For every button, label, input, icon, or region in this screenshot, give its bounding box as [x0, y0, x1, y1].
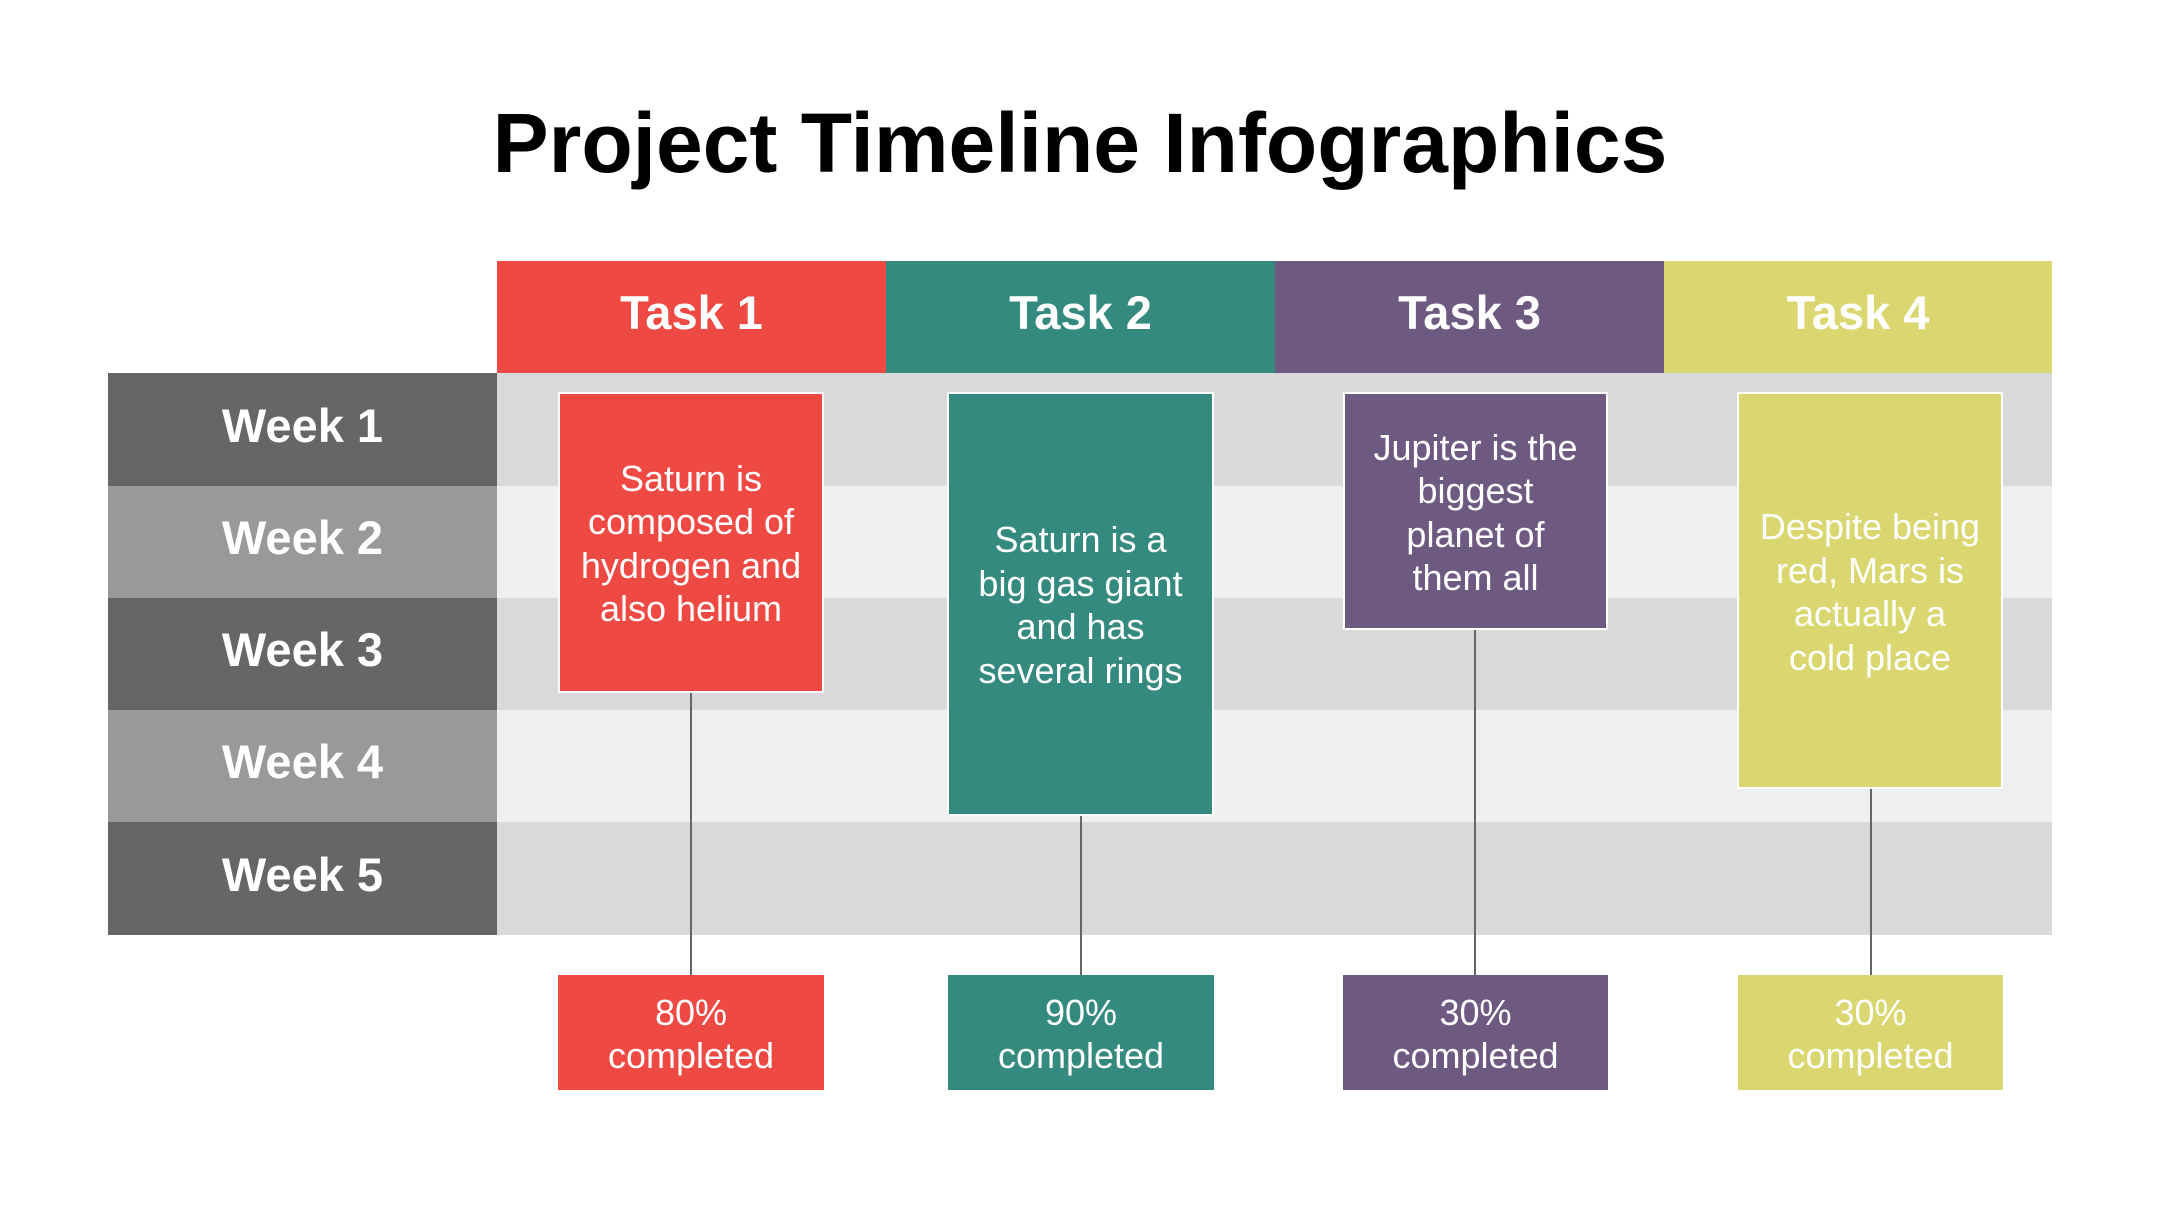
header: Task 1 [497, 261, 886, 373]
header: Task 4: Task 4 [1787, 286, 1929, 338]
task card 2: and has [1016, 606, 1145, 647]
task headers [497, 261, 2052, 373]
connector line: task 1 [690, 692, 692, 975]
task card 4: red, Mars is [1776, 550, 1964, 590]
progress box: 30% task 3: completed [1392, 1035, 1559, 1076]
task card 3: planet of [1406, 514, 1545, 554]
task card 1: hydrogen and [581, 545, 801, 586]
progress box: 90%: 90% [1045, 992, 1117, 1032]
label: Week 2: Week 2 [222, 511, 383, 564]
connector line: task 2 [1080, 815, 1082, 975]
label: Week 5 [108, 822, 497, 935]
task card 3: biggest [1417, 470, 1534, 511]
week labels [108, 373, 497, 935]
task card 4: cold place [1789, 636, 1951, 678]
label: Week 5: Week 5 [222, 848, 383, 900]
task card 1: Saturn is [620, 458, 762, 499]
connector line: task 4 [1870, 789, 1872, 975]
header: Task 3: Task 3 [1398, 286, 1541, 338]
label: Week 1: Week 1 [222, 398, 383, 452]
task card 4: actually a [1794, 593, 1946, 634]
task card 1 [558, 392, 824, 692]
progress box: 80% [558, 975, 824, 1090]
task card 1: also helium [600, 588, 782, 629]
header: Task 2 [886, 261, 1275, 373]
task card 3 [1343, 392, 1608, 630]
task card 3: Jupiter is the [1373, 426, 1578, 468]
header: Task 4 [1664, 261, 2052, 373]
header: Task 3 [1275, 261, 1664, 373]
row backgrounds [497, 373, 2052, 935]
progress box: 80%: 80% [655, 992, 727, 1032]
task card 2: Saturn is a [994, 519, 1167, 560]
label: Week 1 [108, 373, 497, 486]
header: Task 2: Task 2 [1009, 286, 1152, 338]
label: Week 4 [108, 710, 497, 822]
progress box: 30% task 3 [1343, 975, 1608, 1090]
task card 4: Despite being [1760, 506, 1980, 547]
task card 2 [947, 392, 1214, 816]
label: Week 3 [108, 598, 497, 710]
label: Week 4: Week 4 [222, 735, 383, 788]
header: Task 1: Task 1 [620, 286, 763, 338]
label: Week 2 [108, 486, 497, 598]
task card 1: composed of [588, 501, 794, 542]
progress box: 30% task 4: 30% [1834, 992, 1907, 1032]
progress box: 90% [948, 975, 1214, 1090]
connector line: task 3 [1474, 630, 1476, 975]
task card 4 [1737, 392, 2003, 789]
progress box: 30% task 4: completed [1787, 1035, 1954, 1076]
label: Week 3: Week 3 [222, 623, 383, 676]
progress box: 90%: completed [998, 1035, 1164, 1076]
task card 2: several rings [978, 650, 1183, 691]
task card 2: big gas giant [978, 563, 1183, 604]
progress box: 80%: completed [608, 1035, 774, 1076]
progress box: 30% task 3: 30% [1439, 992, 1512, 1032]
title: Project Timeline Infographics [493, 96, 1667, 190]
progress box: 30% task 4 [1738, 975, 2003, 1090]
task card 3: them all [1412, 557, 1539, 598]
